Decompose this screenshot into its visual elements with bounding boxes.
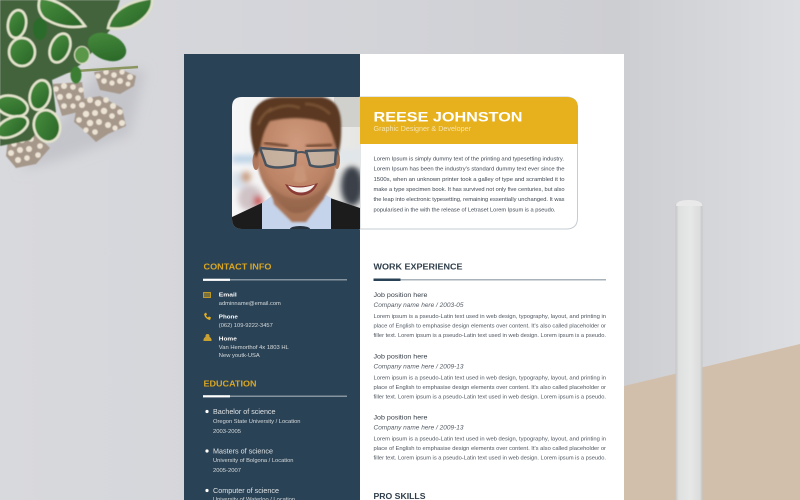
job entry 2: Lorem ipsum is a pseudo-Latin text used in web design, typography, layout, and printing in (374, 376, 606, 382)
degree 3: Computer of science (213, 488, 279, 495)
stubble shading (270, 186, 326, 206)
job entry 3 (374, 414, 606, 462)
job entry 3: Job position here (374, 414, 428, 422)
plant decoration (0, 0, 152, 170)
glasses bridge (296, 152, 306, 153)
summary paragraph: popularised in the with the release of Letraset Lorem Ipsum is a pseudo. (374, 207, 556, 213)
summary card (360, 97, 578, 229)
suit (232, 197, 360, 229)
neck (271, 194, 326, 224)
degree 1: 2003-2005 (213, 429, 241, 435)
job entry 2: filler text. Lorem ipsum is a pseudo-Latin text used in web design. Lorem ipsum is a pseudo. (374, 394, 606, 400)
name: REESE JOHNSTON (374, 108, 522, 124)
education divider (203, 395, 347, 397)
ears (252, 152, 260, 170)
resume page (184, 54, 624, 500)
job entry 2: place of English to emphasise design elements over content. It's also called placeholder or (374, 385, 606, 391)
eyebrows (264, 143, 332, 146)
contact heading: CONTACT INFO (204, 262, 272, 272)
dark sidebar (184, 54, 360, 500)
job entry 2 (374, 354, 606, 400)
job entry 2: Company name here / 2009-13 (374, 364, 464, 370)
glasses (260, 148, 336, 168)
resume pen (676, 200, 702, 500)
education heading: EDUCATION (204, 380, 257, 388)
green leaves (0, 0, 152, 146)
degree 2 (205, 448, 294, 474)
summary paragraph: the leap into electronic typesetting, remaining essentially unchanged. It was (374, 197, 565, 203)
work divider (374, 278, 606, 281)
home row (204, 334, 289, 359)
email row (204, 292, 281, 307)
degree 1 (205, 409, 301, 435)
email row: adminname@email.com (219, 301, 281, 307)
job entry 1: Company name here / 2003-05 (374, 302, 464, 309)
degree 2: 2005-2007 (213, 468, 241, 474)
summary paragraph: Lorem Ipsum is simply dummy text of the printing and typesetting industry. (374, 156, 564, 162)
phone row: Phone (219, 314, 239, 320)
summary paragraph: 1500s, when an unknown printer took a galley of type and scrambled it to (374, 177, 565, 183)
degree 1: Oregon State University / Location (213, 419, 301, 425)
phone row: (062) 109-9222-3457 (219, 323, 273, 329)
degree 3 (205, 488, 295, 500)
degree 1: Bachelor of science (213, 409, 276, 416)
job entry 1: filler text. Lorem ipsum is a pseudo-Latin text used in web design. Lorem ipsum is a pseudo. (374, 333, 606, 339)
summary paragraph: Lorem Ipsum has been the industry's standard dummy text ever since the (374, 167, 565, 173)
smile (285, 183, 318, 196)
degree 2: Masters of science (213, 448, 273, 456)
job entry 1 (374, 292, 606, 339)
plant stem (45, 67, 138, 73)
home row: New youtk-USA (219, 353, 260, 359)
email row: Email (219, 292, 237, 298)
job entry 2: Job position here (374, 354, 428, 360)
job entry 3: place of English to emphasise design elements over content. It's also called placeholder or (374, 446, 606, 452)
hair highlights (258, 104, 330, 125)
education section (203, 380, 347, 500)
home row: Van Hemorthof 4x 1803 HL (219, 345, 289, 351)
job entry 3: filler text. Lorem ipsum is a pseudo-Latin text used in web design. Lorem ipsum is a pseudo. (374, 456, 606, 462)
job entry 3: Lorem ipsum is a pseudo-Latin text used in web design, typography, layout, and printing in (374, 436, 606, 442)
degree 2: University of Bolgona / Location (213, 458, 294, 464)
job entry 1: Lorem ipsum is a pseudo-Latin text used in web design, typography, layout, and printing in (374, 314, 606, 320)
white page sheet (184, 54, 624, 500)
plant shadow (20, 70, 145, 170)
white flower clusters (6, 68, 136, 168)
portrait photo (232, 97, 363, 232)
nose (293, 166, 307, 182)
shirt (262, 194, 331, 229)
work heading: WORK EXPERIENCE (374, 262, 462, 272)
yellow name banner (360, 97, 578, 144)
work experience section (374, 262, 606, 462)
icon: home person (204, 334, 212, 341)
card outline (360, 97, 578, 229)
icon: envelope (204, 292, 210, 298)
job entry 1: Job position here (374, 292, 428, 299)
summary paragraph (374, 156, 565, 213)
job title: Graphic Designer & Developer (374, 126, 472, 133)
blurred office background (232, 150, 363, 211)
hair (250, 97, 341, 158)
icon: phone (204, 312, 211, 320)
tan table surface (624, 344, 800, 500)
face (257, 113, 336, 213)
summary paragraph: make a type specimen book. It has survived not only five centuries, but also (374, 187, 565, 193)
job entry 3: Company name here / 2009-13 (374, 424, 464, 432)
contact divider (203, 279, 347, 281)
job entry 1: place of English to emphasise design elements over content. It's also called placeholder or (374, 324, 606, 330)
home row: Home (219, 336, 238, 342)
contact info section (203, 262, 347, 359)
phone row (204, 312, 273, 329)
